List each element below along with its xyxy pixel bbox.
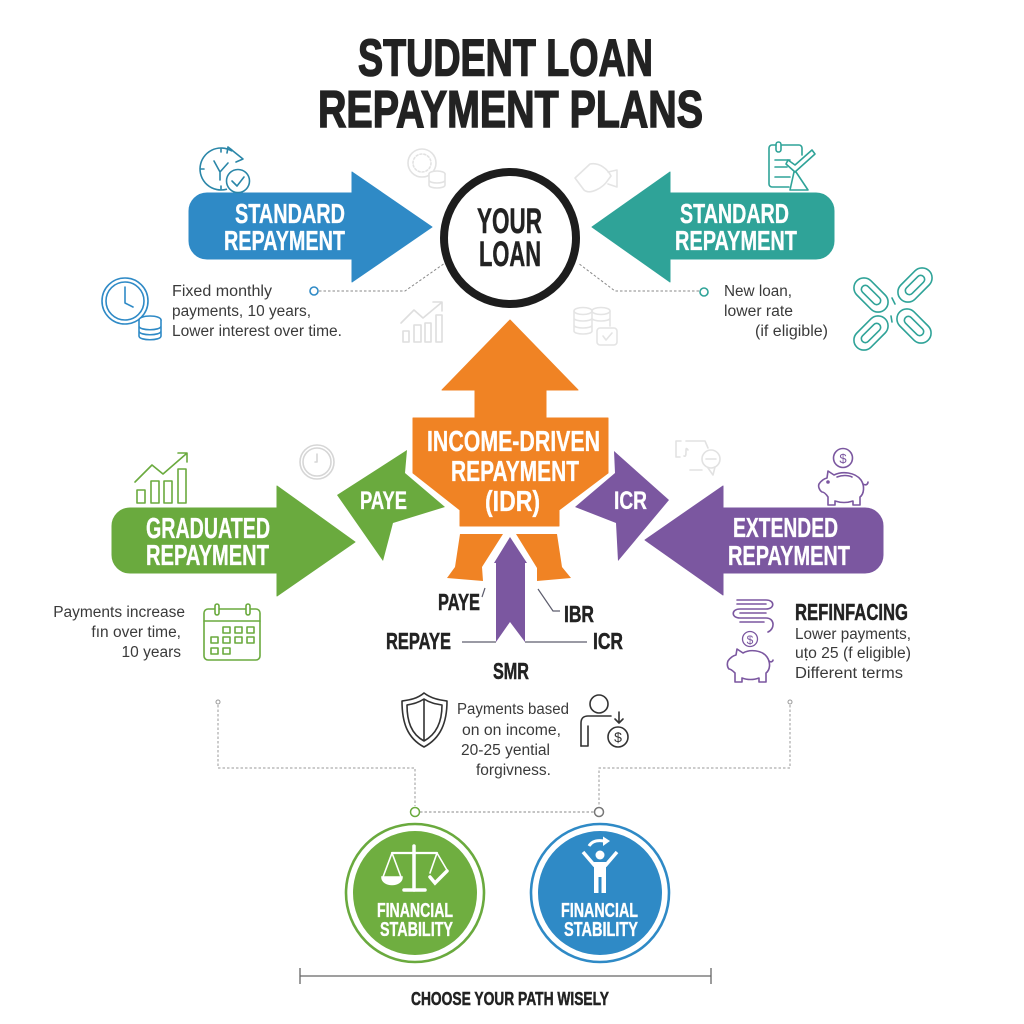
panel: standard repayment (blue arrow): [189, 172, 432, 282]
badge: blue financial stability: [531, 824, 669, 962]
icon: person with dollar coin: $: [614, 729, 622, 745]
green paye arrow: PAYE: [360, 487, 407, 515]
panel: extended repayment: [645, 486, 883, 595]
text: refinancing: [795, 599, 911, 682]
badge: green financial stability: FINANCIAL: [377, 900, 453, 922]
idr label: REPAYMENT: [451, 456, 579, 488]
icon: teal broken chains: [850, 264, 936, 354]
blue arrow shape: [189, 172, 432, 282]
connector: dots between circles: [410, 808, 604, 816]
icon: purple piggy with coin: $: [839, 451, 847, 466]
teal arrow label: STANDARD: [680, 198, 789, 229]
blue arrow label: STANDARD: [235, 198, 345, 229]
text: new loan: lower rate: [724, 303, 793, 320]
icon: faint clock: [300, 445, 334, 479]
text: payments based on income: on on income,: [462, 722, 561, 739]
badge: blue financial stability: STABILITY: [564, 919, 638, 941]
idr label: (IDR): [485, 486, 540, 518]
green arrow shape: [112, 486, 355, 596]
icon: faint piggy: [575, 164, 617, 192]
sub plan labels: REPAYE: [386, 628, 451, 654]
bracket line: [300, 968, 711, 984]
connector: right dashed path: [599, 700, 792, 806]
icon: scales with check: [382, 846, 447, 890]
your loan circle: LOAN: [479, 235, 541, 274]
purple arrow shape: [645, 486, 883, 595]
title: STUDENT LOAN: [358, 30, 653, 88]
text: refinancing: Lower payments,: [795, 626, 911, 643]
badge: green financial stability: STABILITY: [380, 919, 453, 941]
footer text: CHOOSE YOUR PATH WISELY: [411, 988, 609, 1009]
icon: shield: [402, 693, 447, 747]
text: refinancing: REFINFACING: [795, 599, 908, 625]
text: payments increase: Payments increase: [53, 604, 185, 621]
panel: graduated repayment: [112, 486, 355, 596]
icon: person with raised arms: [583, 836, 617, 893]
text: new loan: (if eligible): [755, 323, 828, 340]
icon: purple piggy with coin: [819, 448, 868, 505]
purple icr arrow: ICR: [614, 487, 647, 515]
text: fixed monthly: payments, 10 years,: [172, 303, 311, 320]
orange right leg: [516, 534, 571, 581]
sub plan labels: IBR: [564, 601, 594, 627]
icon: faint clock and coins: [408, 149, 445, 188]
text: refinancing: uṭo 25 (f eligible): [795, 645, 911, 662]
icon: green calendar: [204, 604, 260, 660]
purple central arrow: [494, 537, 527, 642]
icon: purple coil and piggy: $: [747, 633, 754, 647]
your loan circle: YOUR: [477, 202, 542, 241]
purple arrow label: EXTENDED: [733, 512, 838, 543]
idr label: [427, 426, 600, 518]
text: payments based on income: Payments based: [457, 701, 569, 718]
your loan circle: [444, 172, 576, 304]
icon: faint person with coin: [676, 441, 720, 475]
sub plan labels: SMR: [493, 658, 529, 684]
blue arrow label: [224, 198, 345, 256]
orange up arrow block: [413, 320, 608, 526]
connector: left dashed path: [216, 700, 415, 806]
green paye arrow: [337, 450, 445, 561]
teal arrow label: [675, 198, 797, 256]
text: payments increase: fın over time,: [91, 624, 181, 641]
sub plan labels: [386, 589, 623, 684]
teal arrow label: REPAYMENT: [675, 225, 797, 256]
panel: standard repayment (teal arrow): [592, 172, 834, 282]
title: REPAYMENT PLANS: [318, 81, 703, 139]
badge: blue financial stability: FINANCIAL: [561, 900, 638, 922]
orange left leg: [447, 534, 503, 581]
text: fixed monthly: Lower interest over time.: [172, 323, 342, 340]
text: payments increase: [53, 604, 185, 661]
icon: teal clipboard with check: [769, 142, 815, 190]
green arrow label: GRADUATED: [146, 513, 270, 545]
text: refinancing: Different terms: [795, 665, 903, 682]
purple icr arrow: [575, 451, 669, 561]
badge: green financial stability: [346, 824, 484, 962]
text: new loan: New loan,: [724, 283, 792, 300]
connector lines for sub plans: [462, 588, 587, 642]
sub plan labels: ICR: [593, 628, 623, 654]
text: payments based on income: [457, 701, 569, 779]
connector: blue dashed line: [310, 263, 445, 295]
icon: green growth chart: [135, 453, 187, 503]
icon: purple coil and piggy: [727, 600, 773, 682]
purple arrow label: [728, 512, 850, 571]
green arrow label: [146, 513, 270, 572]
text: fixed monthly: [172, 283, 342, 340]
idr label: INCOME-DRIVEN: [427, 426, 600, 458]
icon: blue clock and coins: [102, 278, 161, 340]
text: new loan: [724, 283, 828, 340]
teal arrow shape: [592, 172, 834, 282]
panel: income-driven repayment: [413, 320, 608, 581]
purple arrow label: REPAYMENT: [728, 540, 850, 571]
green arrow label: REPAYMENT: [146, 540, 269, 572]
icon: person with dollar coin: [581, 695, 628, 747]
title: [318, 30, 703, 139]
text: payments increase: 10 years: [122, 644, 181, 661]
connector: teal dashed line: [578, 263, 708, 296]
text: payments based on income: 20-25 yential: [461, 742, 550, 759]
text: payments based on income: forgivness.: [476, 762, 551, 779]
icon: faint database with check: [574, 308, 617, 345]
icon: faint growth chart: [401, 302, 442, 342]
icon: blue clock with check: [200, 147, 250, 192]
blue arrow label: REPAYMENT: [224, 225, 345, 256]
text: fixed monthly: Fixed monthly: [172, 283, 272, 300]
sub plan labels: PAYE: [438, 589, 480, 615]
